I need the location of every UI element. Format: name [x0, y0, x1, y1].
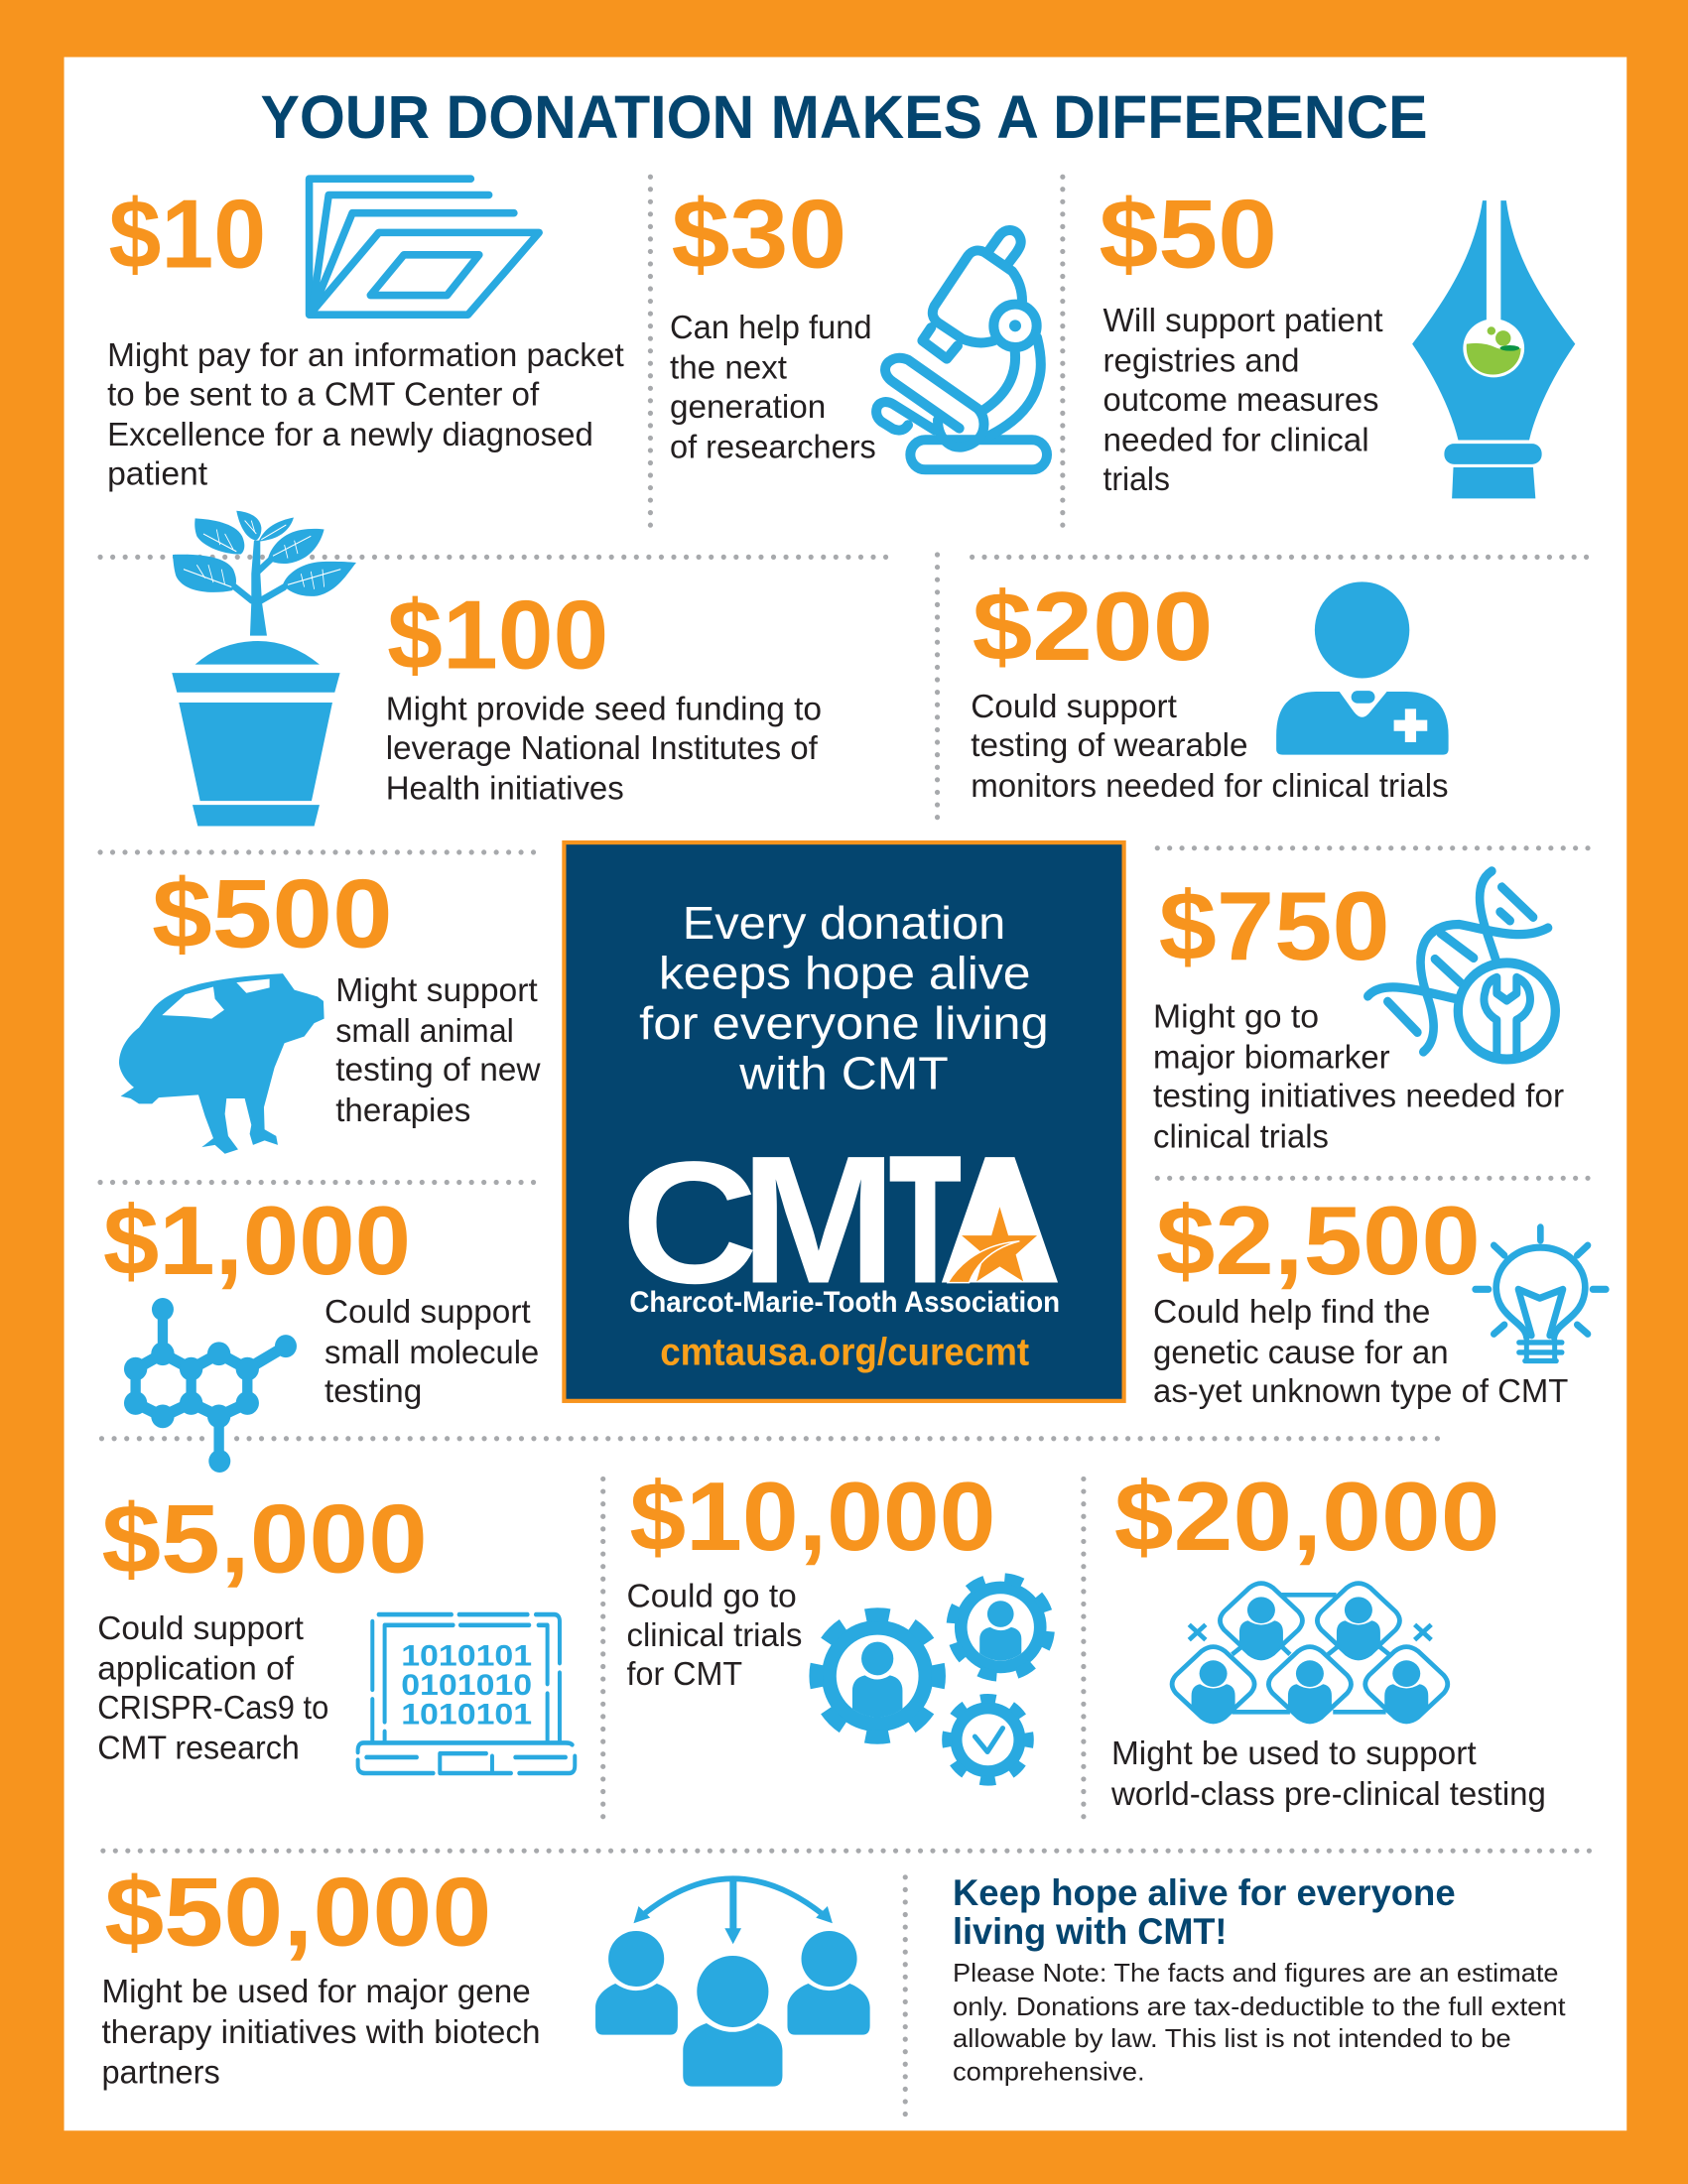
description: $200: Could support: [971, 689, 1178, 725]
logo: CMTA: C: [621, 1125, 758, 1320]
description: $2,500: Could help find the: [1153, 1294, 1430, 1331]
icon: potted plant: [172, 511, 356, 827]
icon: folder of documents: [310, 179, 539, 315]
description: $750: [1153, 999, 1564, 1155]
amount: $30: $30: [671, 179, 846, 288]
amount: $10,000: $10,000: [629, 1462, 995, 1571]
description: $10,000: clinical trials: [627, 1617, 802, 1654]
logo: CMTA: A: [938, 1117, 1063, 1322]
description: $30: of researchers: [670, 430, 876, 466]
description: $5,000: CRISPR-Cas9 to: [97, 1690, 328, 1727]
description: $1,000: [325, 1294, 539, 1410]
description: $100: [386, 692, 822, 808]
description: $500: testing of new: [335, 1052, 541, 1089]
amount: $1,000: $1,000: [103, 1186, 411, 1295]
description: $1,000: Could support: [325, 1294, 531, 1331]
panel background: [564, 842, 1124, 1401]
logo: CMTA: Charcot-Marie-Tooth Association: [629, 1286, 1060, 1319]
panel: $750: [1153, 871, 1564, 1155]
description: $5,000: Could support: [97, 1610, 305, 1647]
icon: microscope: [876, 230, 1047, 469]
description: $200: [971, 689, 1449, 805]
description: $50,000: [101, 1974, 541, 2092]
description: $30: the next: [670, 350, 788, 387]
icon: laptop with binary code: 1010101: [401, 1640, 532, 1673]
large gear: [816, 1614, 939, 1737]
description: $10: patient: [107, 455, 208, 492]
heading: keep hope alive: Keep hope alive for everyone: [953, 1871, 1456, 1913]
description: $500: therapies: [335, 1092, 470, 1129]
panel: $50,000: [101, 1858, 870, 2092]
description: $200: monitors needed for clinical trials: [971, 768, 1449, 805]
description: $50: outcome measures: [1104, 382, 1378, 419]
panel: $2,500: [1153, 1186, 1606, 1410]
description: $50: [1104, 303, 1383, 498]
icon: molecule: [124, 1298, 297, 1473]
amount: $50: $50: [1099, 179, 1277, 288]
panel: $30: [670, 179, 1047, 469]
icon: laptop with binary code: 1010101: [401, 1698, 532, 1731]
slogan: for everyone living: [639, 997, 1049, 1049]
panel: $20,000: [1110, 1462, 1546, 1813]
icon: laptop with binary code: 0101010: [401, 1669, 532, 1702]
panel: $5,000: [97, 1483, 575, 1773]
icon: gears with people: [816, 1568, 1060, 1781]
panel: $50: [1099, 179, 1575, 498]
panel: $10: [107, 179, 624, 492]
amount: $20,000: $20,000: [1114, 1462, 1500, 1571]
amount: $200: $200: [973, 572, 1213, 681]
description: $20,000: world-class pre-clinical testing: [1110, 1776, 1546, 1813]
text block: disclaimer: Please Note: The facts and figures are an estimate: [953, 1958, 1558, 1988]
text block: disclaimer: [953, 1958, 1566, 2087]
panel: $500: [119, 858, 541, 1154]
description: $30: Can help fund: [670, 310, 872, 346]
slogan: keeps hope alive: [659, 947, 1031, 998]
slogan: [639, 897, 1049, 1098]
description: $100: Health initiatives: [386, 771, 624, 808]
icon: light bulb: [1476, 1227, 1606, 1360]
description: $100: leverage National Institutes of: [386, 730, 818, 767]
upper gear: [941, 1568, 1060, 1687]
description: $1,000: testing: [325, 1373, 422, 1410]
description: $500: Might support: [335, 972, 538, 1009]
description: $30: generation: [670, 389, 826, 426]
description: $2,500: genetic cause for an: [1153, 1335, 1449, 1371]
title: YOUR DONATION MAKES A DIFFERENCE: [260, 83, 1428, 151]
panel: $100: [172, 511, 822, 827]
heading: keep hope alive: living with CMT!: [953, 1910, 1227, 1952]
description: $10: to be sent to a CMT Center of: [107, 376, 540, 413]
logo: CMTA: [621, 1117, 1063, 1322]
description: $2,500: as-yet unknown type of CMT: [1153, 1373, 1568, 1410]
icon: DNA and wrench: [1367, 871, 1555, 1060]
description: $10: [107, 337, 624, 492]
description: $10: Excellence for a newly diagnosed: [107, 417, 593, 453]
description: $50,000: partners: [101, 2055, 220, 2092]
panel: $1,000: [103, 1186, 539, 1473]
description: $750: clinical trials: [1153, 1118, 1329, 1155]
panel: $10,000: [627, 1462, 1060, 1781]
description: $10,000: for CMT: [627, 1656, 742, 1693]
logo: CMTA: T: [890, 1121, 960, 1318]
description: $750: Might go to: [1153, 999, 1319, 1036]
logo: CMTA: M: [740, 1117, 897, 1322]
description: $50: Will support patient: [1104, 303, 1383, 339]
description: $50: trials: [1104, 461, 1170, 498]
slogan: with CMT: [738, 1047, 949, 1098]
icon: medical professional: [1276, 581, 1449, 755]
description: $50: needed for clinical: [1104, 423, 1369, 459]
description: $30: [670, 310, 876, 466]
amount: $500: $500: [152, 858, 393, 967]
description: $20,000: Might be used to support: [1111, 1735, 1477, 1772]
description: $50,000: therapy initiatives with biotech: [101, 2014, 541, 2051]
description: $100: Might provide seed funding to: [386, 692, 822, 728]
text block: disclaimer: allowable by law. This list is not intended to be: [953, 2023, 1511, 2053]
description: $2,500: [1153, 1294, 1568, 1410]
icon: pen nib with flask: [1412, 200, 1575, 498]
description: $50: registries and: [1104, 343, 1299, 380]
description: $750: testing initiatives needed for: [1153, 1079, 1564, 1115]
amount: $100: $100: [387, 580, 608, 690]
slogan: Every donation: [683, 897, 1005, 949]
amount: $5,000: $5,000: [101, 1483, 428, 1593]
text block: disclaimer: only. Donations are tax-deductible to the full extent: [953, 1991, 1566, 2021]
icon: mouse: [119, 973, 325, 1154]
description: $750: major biomarker: [1153, 1039, 1390, 1076]
description: $50,000: Might be used for major gene: [101, 1974, 531, 2010]
description: $1,000: small molecule: [325, 1335, 539, 1371]
heading: keep hope alive: [953, 1871, 1456, 1952]
icon: network of people: [1172, 1584, 1448, 1723]
description: $500: [335, 972, 541, 1129]
description: $5,000: [97, 1610, 328, 1767]
website url: cmtausa.org/curecmt: [660, 1330, 1029, 1373]
description: $500: small animal: [335, 1013, 514, 1050]
description: $5,000: application of: [97, 1651, 295, 1688]
amount: $750: $750: [1159, 871, 1390, 980]
icon: laptop with binary code: [358, 1614, 575, 1773]
panel: $200: [971, 572, 1449, 805]
description: $10: Might pay for an information packet: [107, 337, 624, 374]
amount: $10: $10: [108, 179, 266, 288]
panel: closing note: [953, 1871, 1566, 2087]
panel: call to action: [564, 842, 1124, 1401]
description: $10,000: [627, 1579, 802, 1693]
lower gear with check mark: [947, 1699, 1029, 1781]
description: $200: testing of wearable: [971, 727, 1248, 764]
amount: $50,000: $50,000: [104, 1858, 491, 1967]
text block: disclaimer: comprehensive.: [953, 2057, 1145, 2087]
description: $20,000: [1110, 1735, 1546, 1813]
description: $5,000: CMT research: [97, 1731, 300, 1767]
icon: three people with arrows: [595, 1878, 870, 2087]
description: $10,000: Could go to: [627, 1579, 797, 1615]
amount: $2,500: $2,500: [1156, 1186, 1481, 1295]
